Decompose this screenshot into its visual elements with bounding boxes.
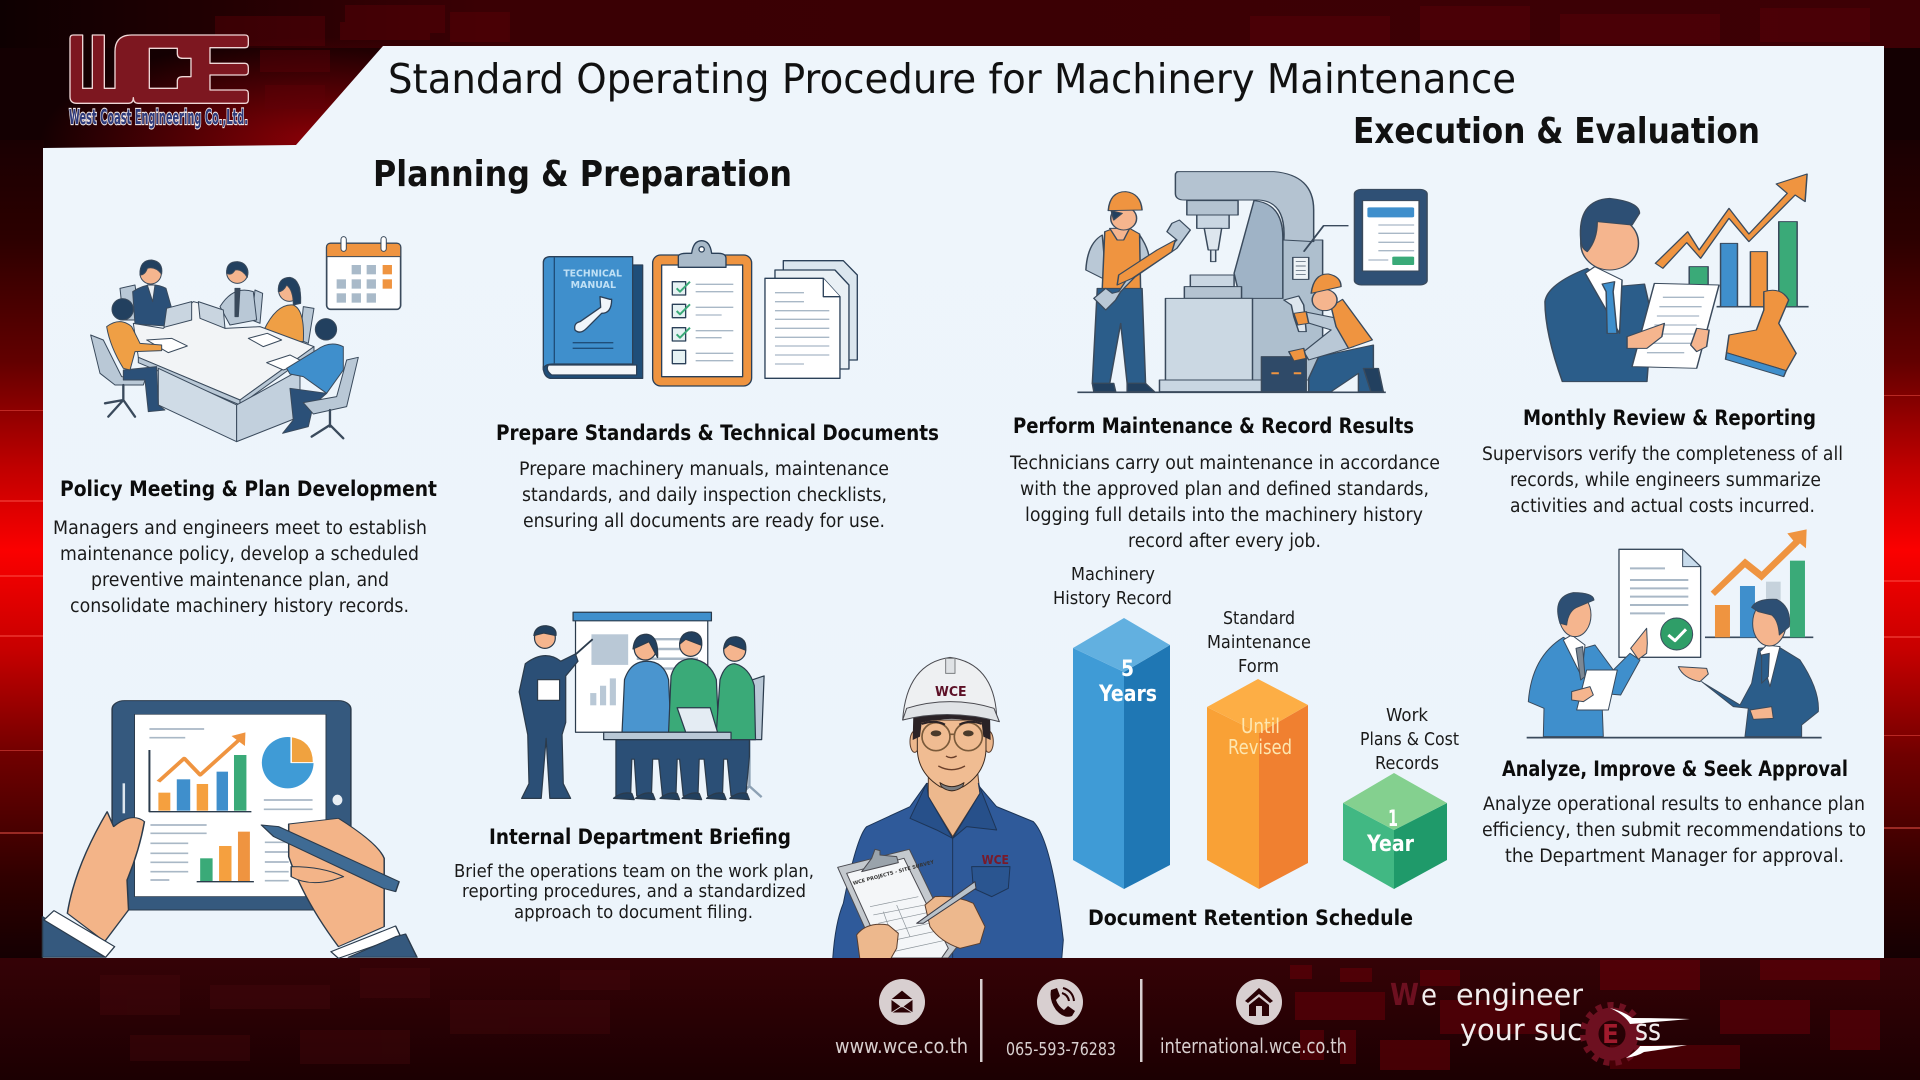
bar: standard maintenance form, until revised: Until [1241,714,1280,738]
text block: Prepare Standards & Technical Documents: standards, and daily inspection checklists, [522,485,887,506]
text block: Monthly Review & Reporting: activities and actual costs incurred. [1510,496,1815,517]
illustration: engineer with hard hat and clipboard: WCE PROJECTS - SITE SURVEY [852,859,935,887]
text block: Internal Department Briefing: Brief the operations team on the work plan, [454,862,814,882]
icon: manual, checklist and documents: TECHNICAL [563,269,623,280]
text block: Policy Meeting & Plan Development: Managers and engineers meet to establish [53,518,427,539]
bar: machinery history record, 5 years [1053,565,1172,889]
slogan: We engineer your success [1390,978,1690,1063]
chart: document retention schedule bars [1053,565,1459,889]
slogan: We engineer your success: engineer [1456,978,1583,1012]
logo: West Coast Engineering [69,35,248,129]
text block: Analyze, Improve & Seek Approval [1482,757,1866,867]
text block: Analyze, Improve & Seek Approval: efficiency, then submit recommendations to [1482,820,1866,841]
icon: reviewer with rising chart and stamp [1545,174,1809,382]
text block: Internal Department Briefing: approach to document filing. [514,903,753,923]
illustration: engineer with hard hat and clipboard [833,657,1063,960]
icon: analysts approving a report [1527,529,1822,738]
bar: standard maintenance form, until revised: Standard [1223,609,1295,629]
text block: Analyze, Improve & Seek Approval: the Department Manager for approval. [1505,846,1844,867]
text block: Analyze, Improve & Seek Approval: Analyze, Improve & Seek Approval [1502,757,1848,781]
text block: Policy Meeting & Plan Development: consolidate machinery history records. [70,596,409,617]
text block: Analyze, Improve & Seek Approval: Analyze operational results to enhance plan [1483,794,1865,815]
text block: Internal Department Briefing: reporting procedures, and a standardized [462,882,806,902]
icon: manual, checklist and documents: MANUAL [571,280,616,291]
text block: Perform Maintenance & Record Results: logging full details into the machinery history [1025,505,1423,526]
text block: Monthly Review & Reporting [1482,406,1843,517]
text block: Prepare Standards & Technical Documents [496,421,939,532]
divider [1140,979,1142,1062]
text block: Policy Meeting & Plan Development [53,477,437,617]
text block: Perform Maintenance & Record Results: with the approved plan and defined standards, [1020,479,1429,500]
bar: work plans and cost records, 1 year: 1 [1388,807,1398,832]
text block: Policy Meeting & Plan Development: Policy Meeting & Plan Development [60,477,437,501]
icon: technicians servicing a machine [1077,172,1427,392]
text block: Monthly Review & Reporting: records, while engineers summarize [1510,470,1821,491]
divider [980,979,982,1062]
text block: Perform Maintenance & Record Results: Technicians carry out maintenance in accordance [1009,453,1440,474]
bar: standard maintenance form, until revised [1207,609,1311,889]
text block: Perform Maintenance & Record Results: record after every job. [1128,531,1321,552]
footer contact: website [835,979,968,1058]
text block: Perform Maintenance & Record Results: Perform Maintenance & Record Results [1013,414,1414,438]
bar: standard maintenance form, until revised: Maintenance [1207,633,1311,653]
bar: machinery history record, 5 years: Years [1098,682,1157,707]
footer contact: home page [1160,979,1347,1058]
bar: work plans and cost records, 1 year: Work [1386,706,1429,726]
illustration: engineer with hard hat and clipboard: WCE [982,852,1009,867]
icon: manual, checklist and documents [543,241,857,386]
text block: Prepare Standards & Technical Documents: ensuring all documents are ready for use. [523,511,885,532]
text block: Policy Meeting & Plan Development: maintenance policy, develop a scheduled [60,544,419,565]
text block: Policy Meeting & Plan Development: preventive maintenance plan, and [91,570,389,591]
footer contact: phone: 065-593-76283 [1006,1039,1116,1060]
text block: Monthly Review & Reporting: Monthly Review & Reporting [1523,406,1816,430]
bar: standard maintenance form, until revised: Revised [1228,735,1292,759]
icon: presenter briefing the team [519,612,764,800]
text block: Internal Department Briefing [454,825,814,923]
bar: work plans and cost records, 1 year: Records [1375,754,1439,774]
footer contact: home page: international.wce.co.th [1160,1034,1347,1058]
text block: Prepare Standards & Technical Documents: Prepare machinery manuals, maintenance [519,459,889,480]
title: Standard Operating Procedure for Machinery Maintenance [388,55,1516,103]
footer contact: website: www.wce.co.th [835,1034,968,1058]
slogan: We engineer your success: your suc [1460,1013,1583,1047]
slogan: We engineer your success: W [1390,978,1419,1013]
footer contact: phone [1006,979,1116,1060]
heading: Planning & Preparation: Planning & Preparation [373,154,792,195]
slogan: We engineer your success: ss [1635,1013,1661,1047]
icon: hands on tablet with charts [42,701,417,958]
icon: meeting around a table with calendar [91,237,401,442]
illustration: engineer with hard hat and clipboard: WCE [935,685,967,700]
bar: machinery history record, 5 years: 5 [1121,657,1134,682]
slogan: We engineer your success: E [1602,1020,1619,1050]
bar: standard maintenance form, until revised: Form [1238,657,1279,677]
text block: Internal Department Briefing: Internal Department Briefing [489,825,791,849]
bar: machinery history record, 5 years: Machinery [1071,565,1155,585]
heading: Document Retention Schedule: Document Retention Schedule [1088,906,1413,930]
infographic canvas: West Coast Engineering Co.,Ltd. [69,105,248,129]
text block: Monthly Review & Reporting: Supervisors verify the completeness of all [1482,444,1843,465]
text block: Perform Maintenance & Record Results [1009,414,1440,552]
bar: work plans and cost records, 1 year [1343,706,1459,889]
bar: machinery history record, 5 years: History Record [1053,589,1172,609]
bar: work plans and cost records, 1 year: Year [1366,832,1414,857]
slogan: We engineer your success: e [1421,978,1437,1012]
heading: Execution & Evaluation: Execution & Evaluation [1353,111,1760,152]
bar: work plans and cost records, 1 year: Plans & Cost [1360,730,1459,750]
text block: Prepare Standards & Technical Documents: Prepare Standards & Technical Documents [496,421,939,445]
